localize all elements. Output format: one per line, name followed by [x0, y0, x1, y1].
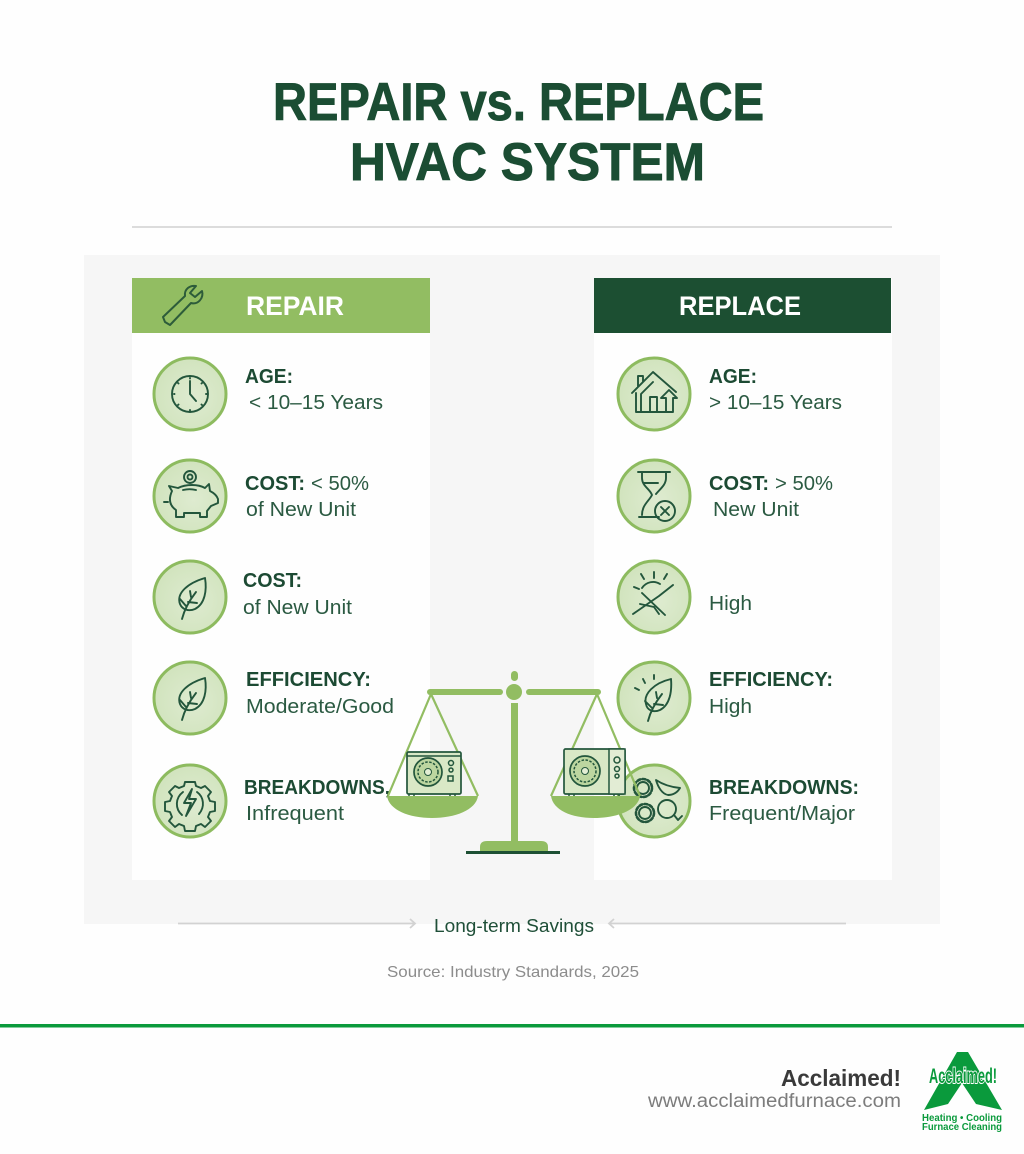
balance scale	[387, 671, 640, 854]
long-term savings arrows: Long-term Savings	[434, 916, 594, 936]
replace: cost: New Unit	[713, 498, 799, 521]
repair: breakdowns: Infrequent	[246, 802, 344, 825]
replace header: REPLACE	[679, 291, 801, 321]
repair: cost 2	[154, 561, 352, 633]
replace: breakdowns: BREAKDOWNS:	[709, 777, 859, 799]
repair: efficiency: Moderate/Good	[246, 695, 394, 718]
replace: age: AGE:	[709, 366, 757, 388]
repair header	[132, 278, 430, 333]
air conditioner: left	[407, 752, 461, 797]
logo: Furnace Cleaning	[922, 1121, 1002, 1133]
logo	[922, 1052, 1002, 1133]
replace: cost	[618, 460, 833, 532]
replace: age: > 10–15 Years	[709, 391, 842, 414]
footer rule	[0, 1024, 1024, 1028]
repair: age: < 10–15 Years	[249, 391, 383, 414]
replace: cost: COST:	[709, 473, 769, 495]
title	[273, 73, 764, 192]
panel: repair	[132, 278, 430, 880]
repair: age: AGE:	[245, 366, 293, 388]
repair: efficiency	[154, 662, 394, 734]
footer brand: Acclaimed!	[781, 1065, 901, 1091]
source: Source: Industry Standards, 2025	[387, 964, 639, 981]
panel: replace	[594, 278, 892, 880]
footer brand	[647, 1065, 901, 1112]
replace: cost: > 50%	[775, 472, 833, 495]
long-term savings arrows	[178, 916, 846, 936]
replace: efficiency: High	[709, 695, 752, 718]
replace: age	[618, 358, 842, 430]
footer brand: www.acclaimedfurnace.com	[647, 1091, 901, 1112]
repair: breakdowns	[154, 765, 390, 837]
replace: efficiency: EFFICIENCY:	[709, 669, 833, 691]
repair: cost: COST:	[245, 473, 305, 495]
replace: high	[618, 561, 752, 633]
repair: age	[154, 358, 383, 430]
repair: cost 2: of New Unit	[243, 596, 352, 619]
replace: breakdowns: Frequent/Major	[709, 802, 855, 825]
repair: cost: < 50%	[311, 472, 369, 495]
title: HVAC SYSTEM	[350, 133, 705, 192]
replace header	[594, 278, 891, 333]
background panel	[84, 255, 940, 924]
repair header: REPAIR	[246, 291, 344, 321]
repair: cost	[154, 460, 369, 532]
replace: efficiency	[618, 662, 833, 734]
air conditioner: right	[564, 749, 625, 797]
left pan	[387, 694, 478, 818]
repair: cost: of New Unit	[246, 498, 356, 521]
icon: wrench	[163, 286, 202, 325]
repair: breakdowns: BREAKDOWNS,	[244, 777, 390, 799]
repair: cost 2: COST:	[243, 570, 302, 592]
right pan	[551, 694, 640, 818]
replace: breakdowns	[618, 765, 859, 837]
replace: high: High	[709, 592, 752, 615]
scale stand	[427, 671, 601, 852]
repair: efficiency: EFFICIENCY:	[246, 669, 371, 691]
logo: Heating • Cooling	[922, 1112, 1002, 1124]
title: REPAIR vs. REPLACE	[273, 73, 764, 132]
